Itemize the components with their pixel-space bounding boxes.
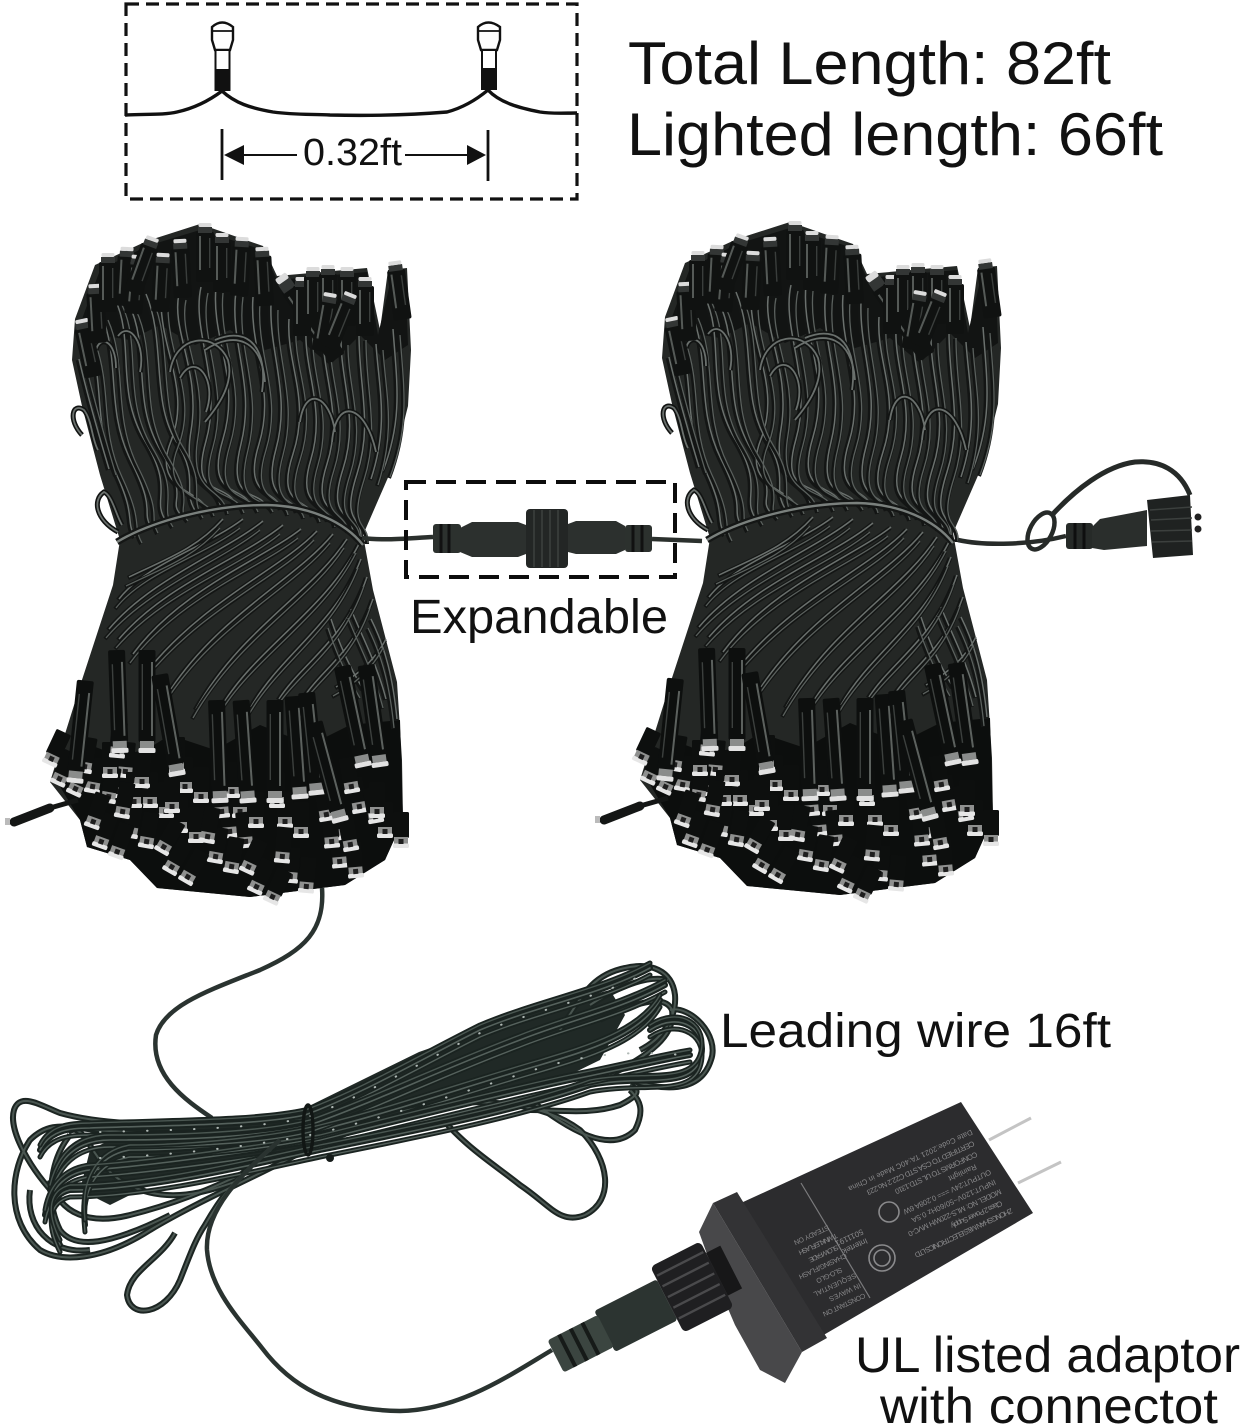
function list: STEADY ON xyxy=(793,1223,830,1245)
flange shell xyxy=(699,1203,802,1383)
wire from bundle to coil xyxy=(155,888,322,1118)
function list: TWINKLE/FLASH xyxy=(797,1231,838,1255)
rating text: CERTIFIED TO CSA STD C22.2 No.223 xyxy=(865,1139,976,1197)
heading: lighted length: Lighted length: 66ft xyxy=(627,101,1163,168)
intertek mark text: 5011191 xyxy=(833,1227,865,1248)
flange face xyxy=(713,1192,827,1352)
connector wire between bundles xyxy=(362,537,702,541)
rating text: Rainlight xyxy=(946,1162,978,1183)
photo: power adapter xyxy=(539,1102,1061,1389)
rating text: Date Code:2021 TA:40C Made in China xyxy=(846,1128,974,1194)
function list: CONSTANT ON xyxy=(821,1291,866,1317)
leading wire coil xyxy=(13,888,713,1411)
label: expandable: Expandable xyxy=(410,591,668,644)
function list xyxy=(783,1221,866,1320)
function list: SEQUENTIAL xyxy=(812,1271,857,1297)
rating text: OUTPUT:24V === 0.208A 6W xyxy=(901,1168,993,1217)
rating text: MODEL NO: MLS-220WH MVC-0 xyxy=(907,1187,1003,1238)
photo: right light bundle xyxy=(595,221,1002,904)
function list: IN WAVES xyxy=(827,1281,861,1302)
panel: bulb spacing diagram xyxy=(125,4,577,199)
wire line xyxy=(125,90,577,115)
intertek mark text xyxy=(833,1227,869,1257)
heading: total length: Total Length: 82ft xyxy=(628,30,1111,97)
wire to adapter xyxy=(207,1140,552,1411)
cable tie xyxy=(303,1105,313,1155)
socket nut and plug xyxy=(539,1234,748,1389)
photo: left light bundle xyxy=(5,223,412,906)
spacing label: 0.32ft xyxy=(303,132,402,174)
prongs xyxy=(989,1118,1061,1183)
rating text: ZHONGSHAN M&S ELECTRONICS LTD xyxy=(913,1206,1014,1260)
label: adaptor line one: UL listed adaptor xyxy=(855,1327,1240,1383)
panel: expandable connector xyxy=(406,482,675,577)
coil body xyxy=(80,990,625,1205)
tie knot xyxy=(326,1154,334,1162)
coil strands xyxy=(13,966,713,1311)
rating text xyxy=(846,1126,1014,1273)
intertek mark text: Intertek xyxy=(840,1236,869,1256)
certification marks xyxy=(869,1202,899,1271)
rating text: INPUT:120V~50/60Hz 0.5A xyxy=(910,1178,997,1225)
main strand dark layers xyxy=(40,963,702,1252)
function list: CHASING/FLASH xyxy=(797,1251,848,1280)
function list: SLO-GLO xyxy=(814,1266,843,1284)
divider xyxy=(801,1183,870,1298)
icon: left bulb xyxy=(212,22,233,91)
strand highlights xyxy=(13,966,713,1311)
end plug with cap strap xyxy=(958,462,1202,558)
rating text: Class 2 Power Supply xyxy=(949,1199,1004,1231)
dimension arrows xyxy=(222,129,488,181)
icon: right bulb xyxy=(478,22,500,90)
function list: SLOW FADE xyxy=(807,1243,839,1263)
adapter body xyxy=(730,1102,1033,1340)
icon: male and female plug joint xyxy=(433,509,652,568)
label: leading wire: Leading wire 16ft xyxy=(720,1005,1111,1058)
rating text: CONFORMS TO UL STD.1310 xyxy=(893,1150,979,1196)
moulded dots on wire xyxy=(100,971,690,1158)
